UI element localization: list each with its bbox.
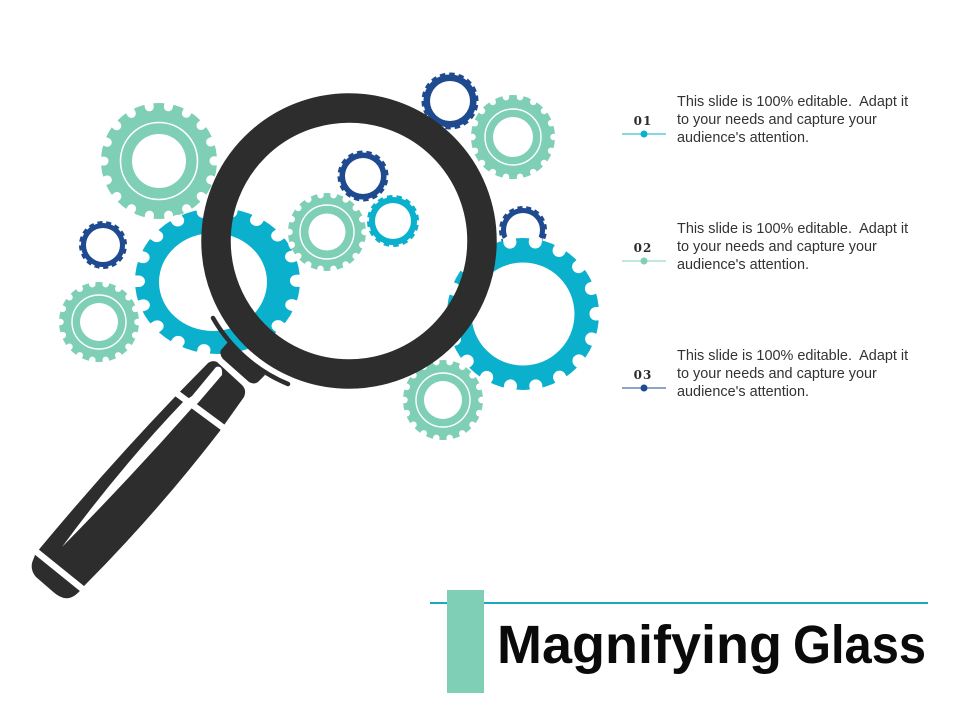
gear: mint bottom right (403, 360, 483, 440)
text 02: audience's attention. (677, 257, 809, 273)
gear: small navy left (79, 221, 127, 269)
gear: cyan inside lens (367, 195, 419, 247)
text 02: This slide is 100% editable. Adapt it (677, 221, 908, 237)
text 03: to your needs and capture your (677, 366, 877, 382)
text 01: This slide is 100% editable. Adapt it (677, 94, 908, 110)
handle upper band (175, 392, 225, 429)
item 01 (622, 94, 908, 146)
gear: mint inside lens (288, 193, 366, 271)
gear: navy behind right cyan gear (499, 206, 547, 254)
handle (32, 361, 245, 598)
magnifying glass (32, 108, 482, 598)
item 02 (622, 221, 908, 273)
marker 03 (622, 384, 666, 392)
crescent collar arc (213, 318, 288, 384)
number 03: 03 (634, 368, 652, 382)
gear: mint lower left (59, 282, 139, 362)
marker 01 (622, 130, 666, 138)
gear: navy inside lens (338, 150, 388, 202)
lens ring (216, 108, 482, 374)
text 01: audience's attention. (677, 130, 809, 146)
title: Glass (793, 615, 926, 675)
title (497, 615, 926, 675)
collar (220, 342, 265, 384)
text 03: This slide is 100% editable. Adapt it (677, 348, 908, 364)
gear: mint top right (471, 95, 555, 179)
text 01: to your needs and capture your (677, 112, 877, 128)
title rule (430, 602, 928, 604)
gear: large cyan right (447, 238, 599, 390)
gear: large cyan left (135, 208, 300, 354)
text 02: to your needs and capture your (677, 239, 877, 255)
title: Magnifying (497, 615, 782, 675)
handle highlight (62, 367, 222, 547)
handle lower band (33, 549, 85, 591)
item 03 (622, 348, 908, 400)
gear: large mint top left (101, 103, 217, 219)
marker 02 (622, 258, 666, 264)
number 01: 01 (634, 114, 652, 128)
gear: navy top right (422, 72, 478, 130)
text 03: audience's attention. (677, 384, 809, 400)
number 02: 02 (634, 241, 652, 255)
title accent block (447, 590, 484, 693)
